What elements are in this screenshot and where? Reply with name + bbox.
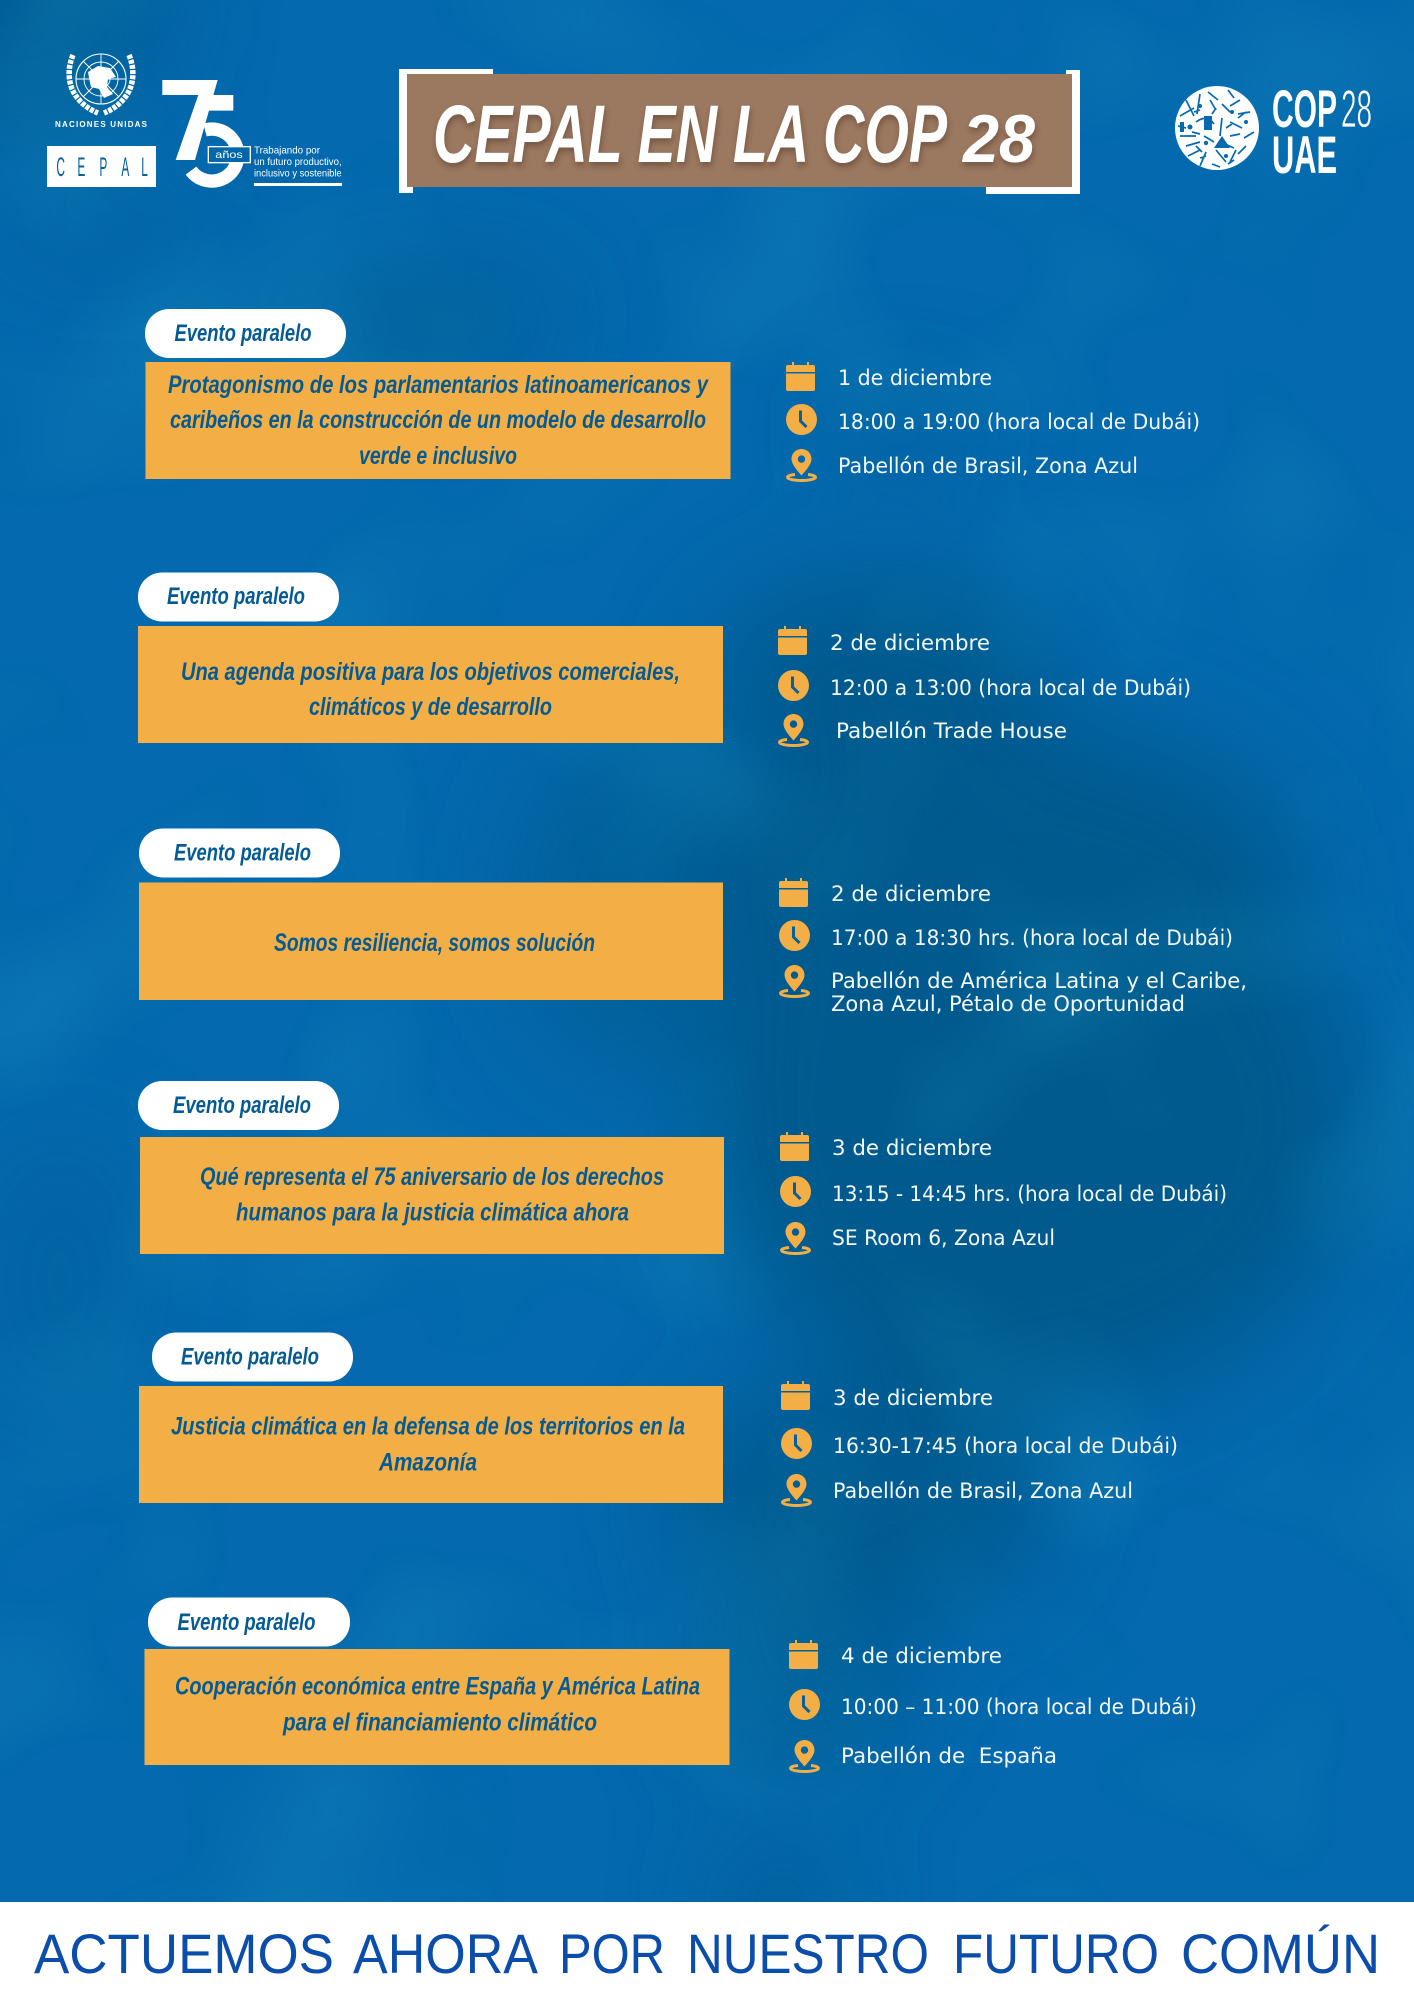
event details: 4 de diciembre <box>841 1644 1002 1669</box>
event details: Pabellón de Brasil, Zona Azul <box>833 1479 1133 1504</box>
footer slogan <box>34 1922 1380 1985</box>
footer slogan: POR <box>559 1922 665 1985</box>
tagline <box>254 145 342 186</box>
footer slogan: FUTURO <box>953 1922 1159 1985</box>
event title box: caribeños en la construcción de un modelo de desarrollo <box>170 406 706 434</box>
event details: 18:00 a 19:00 (hora local de Dubái) <box>838 410 1200 435</box>
event details: Pabellón de Brasil, Zona Azul <box>838 454 1138 479</box>
event title box <box>140 1137 724 1254</box>
event title box <box>146 362 730 479</box>
event title box: Una agenda positiva para los objetivos comerciales, <box>181 658 680 686</box>
tagline: un futuro productivo, <box>254 157 342 168</box>
panel: event 3 <box>139 828 1247 1017</box>
pill: Evento paralelo <box>138 1081 339 1130</box>
event details: Pabellón de América Latina y el Caribe, <box>831 969 1247 994</box>
pill: Evento paralelo: Evento paralelo <box>173 1092 311 1119</box>
COP28 UAE wordmark: UAE <box>1272 126 1337 185</box>
event title box <box>139 1386 723 1503</box>
event details <box>786 362 1200 480</box>
footer slogan: ACTUEMOS <box>34 1922 334 1985</box>
event details: 10:00 – 11:00 (hora local de Dubái) <box>841 1695 1197 1720</box>
footer slogan: AHORA <box>353 1922 539 1985</box>
label: Naciones Unidas: NACIONES UNIDAS <box>55 120 148 129</box>
event details: Pabellón Trade House <box>836 719 1067 744</box>
event details: 3 de diciembre <box>833 1386 993 1411</box>
pill: Evento paralelo: Evento paralelo <box>167 583 305 610</box>
event details <box>779 878 1247 1017</box>
event title box: Qué representa el 75 aniversario de los derechos <box>200 1163 664 1191</box>
tagline: inclusivo y sostenible <box>254 169 342 180</box>
title text: CEPAL EN LA COP <box>433 89 947 180</box>
event details: 12:00 a 13:00 (hora local de Dubái) <box>830 676 1191 701</box>
event details: Zona Azul, Pétalo de Oportunidad <box>831 992 1185 1017</box>
event details: 2 de diciembre <box>831 882 991 907</box>
COP28 UAE wordmark: COP <box>1272 80 1337 139</box>
panel: event 2 <box>138 572 1191 746</box>
pill: Evento paralelo: Evento paralelo <box>178 1609 316 1636</box>
event details: Pabellón de España <box>841 1744 1057 1769</box>
logo: Naciones Unidas emblem and CEPAL <box>47 54 156 187</box>
icon: UN emblem <box>69 54 133 113</box>
pill: Evento paralelo <box>152 1332 353 1382</box>
event title box: para el financiamiento climático <box>282 1708 597 1736</box>
badge: años: años <box>215 150 243 161</box>
event details <box>778 626 1191 746</box>
panel: event 1 <box>145 309 1200 480</box>
event title box: Somos resiliencia, somos solución <box>274 929 595 957</box>
pill: Evento paralelo: Evento paralelo <box>181 1344 319 1370</box>
event details: 3 de diciembre <box>832 1136 992 1161</box>
panel: event 5 <box>139 1332 1178 1506</box>
event title box: Justicia climática en la defensa de los territorios en la <box>171 1412 685 1440</box>
event details: 16:30-17:45 (hora local de Dubái) <box>833 1434 1178 1459</box>
title text: 28 <box>961 101 1035 177</box>
pill: Evento paralelo <box>148 1598 350 1646</box>
icon: COP28 globe <box>1175 86 1259 170</box>
event title box: Cooperación económica entre España y América Latina <box>175 1672 700 1700</box>
event details <box>781 1381 1178 1506</box>
footer slogan: COMÚN <box>1181 1922 1380 1985</box>
event title box: climáticos y de desarrollo <box>309 693 552 721</box>
CEPAL box: CEPAL <box>56 153 148 182</box>
event details: 13:15 - 14:45 hrs. (hora local de Dubái) <box>832 1182 1227 1207</box>
event details: 1 de diciembre <box>838 366 992 391</box>
event details: SE Room 6, Zona Azul <box>832 1226 1055 1251</box>
event details: 2 de diciembre <box>830 631 990 656</box>
event title box <box>144 1649 730 1765</box>
logo: COP28 UAE <box>1175 80 1372 185</box>
event title box: Protagonismo de los parlamentarios latinoamericanos y <box>168 371 709 399</box>
event title box: humanos para la justicia climática ahora <box>236 1198 629 1226</box>
event title box: Amazonía <box>378 1448 477 1476</box>
tagline: Trabajando por <box>254 145 320 156</box>
pill: Evento paralelo: Evento paralelo <box>174 320 312 347</box>
COP28 UAE wordmark <box>1272 80 1372 185</box>
event details <box>780 1132 1227 1254</box>
event title box <box>138 626 723 743</box>
pill: Evento paralelo <box>139 828 340 878</box>
pill: Evento paralelo: Evento paralelo <box>174 840 311 866</box>
panel: event 6 <box>144 1598 1197 1772</box>
event details <box>789 1640 1197 1772</box>
pill: Evento paralelo <box>138 572 339 622</box>
COP28 UAE wordmark: 28 <box>1341 80 1372 139</box>
panel: event 4 <box>138 1081 1227 1254</box>
title banner <box>399 69 1080 194</box>
footer slogan: NUESTRO <box>687 1922 929 1985</box>
footer banner <box>0 1902 1414 2000</box>
event title box <box>139 882 723 1000</box>
event details: 17:00 a 18:30 hrs. (hora local de Dubái) <box>831 926 1233 951</box>
event title box: verde e inclusivo <box>359 442 517 470</box>
logo: 75 años <box>162 80 342 186</box>
numeral 75 <box>162 80 238 181</box>
badge: años <box>208 147 250 163</box>
pill: Evento paralelo <box>145 309 346 358</box>
